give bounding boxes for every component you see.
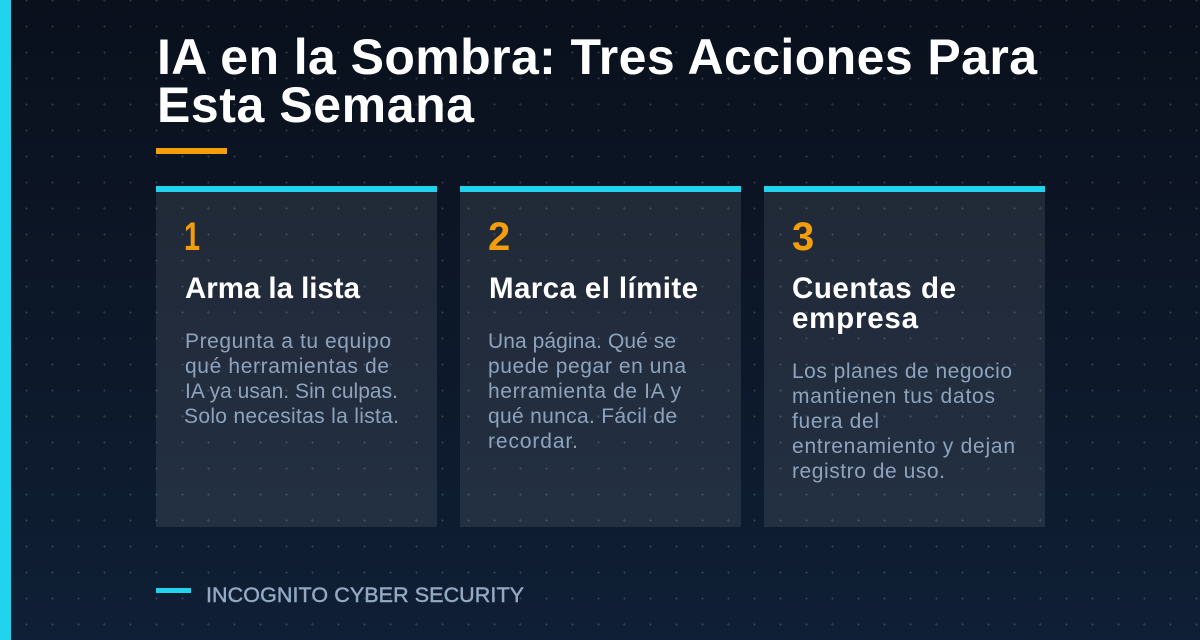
number 1: 1	[184, 215, 200, 259]
body text 1: IA ya usan. Sin culpas.	[185, 380, 398, 403]
panel: step 1	[156, 186, 437, 527]
body text 2: Una página. Qué se	[488, 330, 676, 353]
footer brand: INCOGNITO CYBER SECURITY	[206, 583, 524, 607]
body text 1: Solo necesitas la lista.	[184, 405, 399, 428]
title	[157, 29, 1038, 133]
body text 1: Pregunta a tu equipo	[185, 330, 391, 353]
heading: Marca el límite: Marca el límite	[489, 272, 698, 305]
title: Esta Semana	[157, 77, 475, 133]
number 2: 2	[488, 215, 510, 259]
body text 2	[488, 330, 686, 453]
heading: Arma la lista: Arma la lista	[185, 272, 361, 305]
body text 3	[792, 360, 1015, 483]
heading: Cuentas de empresa: Cuentas de	[792, 272, 956, 305]
body text 3: mantienen tus datos	[792, 385, 995, 408]
body text 1: qué herramientas de	[185, 355, 389, 378]
panel: step 2	[460, 186, 741, 527]
body text 1	[184, 330, 399, 428]
body text 2: qué nunca. Fácil de	[488, 405, 677, 428]
left accent bar	[0, 0, 11, 640]
body text 2: herramienta de IA y	[488, 380, 682, 403]
title: IA en la Sombra: Tres Acciones Para	[157, 29, 1038, 85]
body text 3: registro de uso.	[792, 460, 945, 483]
body text 3: Los planes de negocio	[792, 360, 1012, 383]
title underline	[156, 148, 227, 154]
body text 2: puede pegar en una	[488, 355, 686, 378]
body text 3: entrenamiento y dejan	[792, 435, 1015, 458]
body text 3: fuera del	[792, 410, 879, 433]
heading: Cuentas de empresa	[792, 272, 956, 335]
footer accent line	[156, 588, 191, 593]
body text 2: recordar.	[488, 430, 578, 453]
heading: Cuentas de empresa: empresa	[792, 302, 919, 335]
panel: step 3	[764, 186, 1045, 527]
number 3: 3	[792, 215, 814, 259]
